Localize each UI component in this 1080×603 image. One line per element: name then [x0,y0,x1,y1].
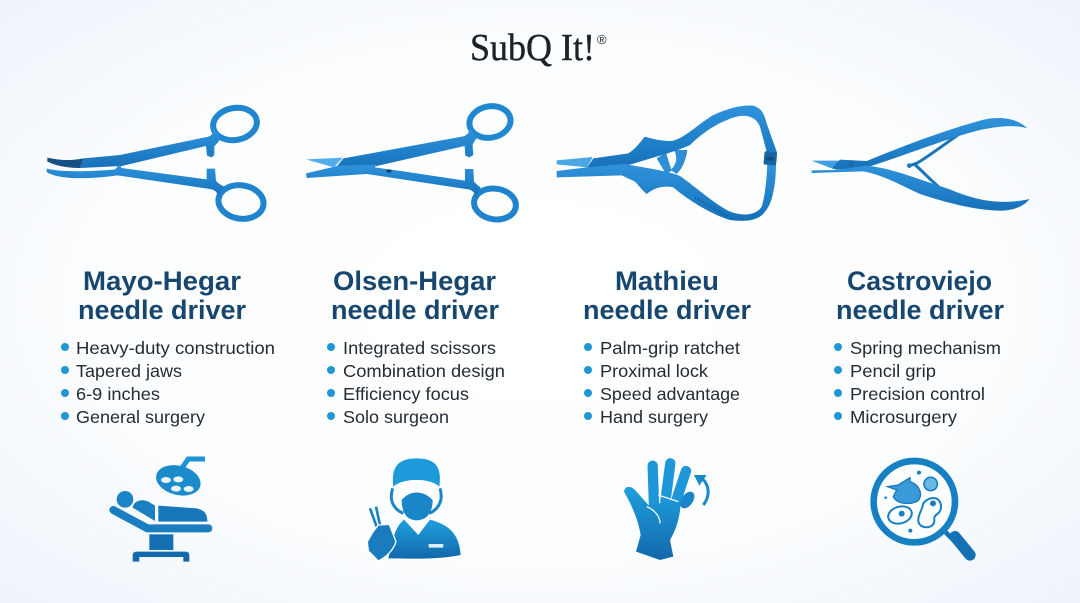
instrument: Castroviejo needle driver [812,118,1029,211]
thumb, palm and cuff [624,487,681,560]
column: Mayo-Hegar text: Mayo-Hegar [83,266,241,296]
icon: surgeon with mask [367,458,461,561]
upper handle [587,106,777,169]
lower ring [216,182,266,222]
icon: operating table with lamp [113,459,208,562]
lower ring [472,186,518,222]
fingers [653,463,686,505]
column: Mayo-Hegar text: needle driver [78,295,246,325]
column: Olsen-Hegar text: Olsen-Hegar [333,266,496,296]
icon: magnifying glass with microbes [874,461,970,555]
column: Olsen-Hegar text: Efficiency focus [343,384,469,404]
lower arm [812,166,1029,211]
column: Mathieu text: Proximal lock [600,361,708,381]
column: Mayo-Hegar text: Heavy-duty construction [76,338,275,358]
column: Olsen-Hegar text: needle driver [331,295,499,325]
upper jaw [812,161,840,168]
column: Mayo-Hegar text: General surgery [76,407,205,427]
upper jaw [557,157,593,167]
column: Mathieu text: Speed advantage [600,384,740,404]
column: Castroviejo text [834,266,1004,427]
upper ring [467,103,513,141]
icon: gloved hand with arrow [624,463,708,560]
column: Mayo-Hegar text [61,266,275,427]
springs [909,134,959,189]
column: Mathieu text: Mathieu [615,266,719,296]
column: Mayo-Hegar text: Tapered jaws [76,361,182,381]
column: Mayo-Hegar text: 6-9 inches [76,384,160,404]
instrument: Mathieu needle driver [557,106,777,221]
upper arm [336,128,477,169]
instrument: Olsen-Hegar needle driver [306,103,518,222]
lower jaw and arm [47,165,224,196]
title: SubQ It! logo: ® [597,32,607,47]
column: Castroviejo text: Microsurgery [850,407,957,427]
column: Castroviejo text: Precision control [850,384,985,404]
column: Mathieu text [583,266,751,427]
ratchet [657,150,687,174]
instrument: Mayo-Hegar needle driver [47,104,266,222]
column: Mathieu text: needle driver [583,295,751,325]
lower handle and jaw [557,164,776,221]
column: Castroviejo text: Spring mechanism [850,338,1001,358]
upper arm [80,128,221,168]
column: Olsen-Hegar text: Integrated scissors [343,338,496,358]
column: Mathieu text: Hand surgery [600,407,708,427]
column: Olsen-Hegar text [327,266,505,427]
column: Olsen-Hegar text: Combination design [343,361,505,381]
title: SubQ It! logo: SubQ It! [470,27,595,69]
upper jaw [47,158,83,168]
hinge [763,151,777,166]
column: Castroviejo text: needle driver [836,295,1004,325]
column: Castroviejo text: Pencil grip [850,361,936,381]
column: Castroviejo text: Castroviejo [847,266,992,296]
lower blade and arm [306,165,481,196]
column: Mathieu text: Palm-grip ratchet [600,338,740,358]
upper arm [832,118,1027,170]
upper scissor blade [306,158,343,167]
upper ring [211,104,259,144]
column: Olsen-Hegar text: Solo surgeon [343,407,449,427]
